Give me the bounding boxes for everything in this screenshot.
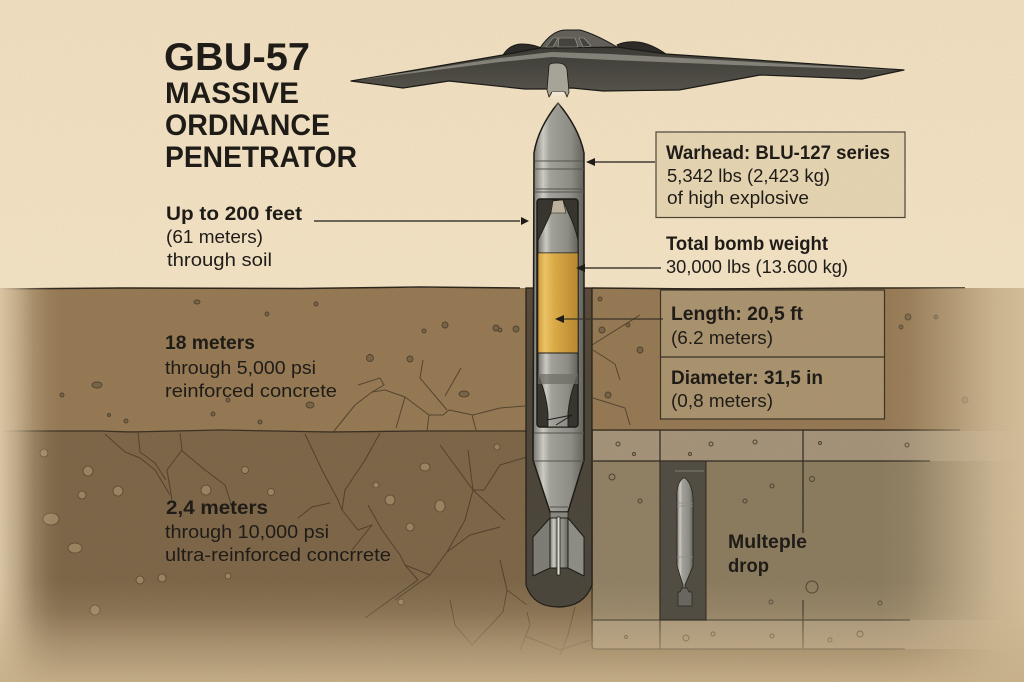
bunker lines <box>592 430 960 649</box>
text: concrete 10000 psi: ultra-reinforced concrrete <box>165 544 391 565</box>
text: total bomb weight: Total bomb weight <box>666 234 829 255</box>
panel: warhead: 5,342 lbs (2,423 kg) <box>667 165 830 186</box>
arrow: length <box>555 315 663 323</box>
outer casing <box>533 103 584 512</box>
panel: dimensions: Diameter: 31,5 in <box>671 368 823 389</box>
text: soil penetration: (61 meters) <box>166 226 263 247</box>
title: GBU-57 <box>164 36 310 79</box>
windows <box>546 38 591 47</box>
panel: warhead: of high explosive <box>667 187 809 208</box>
bomb: GBU-57 cutaway <box>533 103 584 576</box>
title <box>164 36 357 174</box>
edge fades <box>0 288 62 682</box>
text: concrete 5000 psi: through 5,000 psi <box>165 357 316 378</box>
ground surface line <box>0 287 965 289</box>
concrete slab: floor <box>593 620 1024 649</box>
text: multiple drop <box>728 531 807 577</box>
aircraft: B-2 bomber <box>351 30 904 108</box>
second shaft <box>660 461 706 620</box>
panel: dimensions <box>660 290 885 419</box>
panel: dimensions: (0,8 meters) <box>671 390 773 411</box>
title: ORDNANCE <box>165 109 330 142</box>
text: soil penetration <box>166 203 303 270</box>
shaft <box>526 288 592 607</box>
wing <box>351 47 904 91</box>
small bomb in shaft <box>660 461 706 620</box>
text: total bomb weight: 30,000 lbs (13.600 kg) <box>666 256 848 277</box>
fuze wire <box>547 415 572 425</box>
cracks <box>105 315 895 655</box>
high explosive fill <box>538 253 578 353</box>
background: sky <box>0 0 1024 290</box>
warhead aft section <box>538 353 578 427</box>
text: concrete 5000 psi: 18 meters <box>165 332 255 354</box>
aggregate <box>609 440 909 642</box>
text: multiple drop: Multeple <box>728 531 807 553</box>
text: multiple drop: drop <box>728 555 769 577</box>
concrete bunker <box>592 430 1024 649</box>
casing bands <box>534 161 584 507</box>
title: PENETRATOR <box>165 141 357 174</box>
chamber fill <box>593 461 1024 620</box>
tail fins <box>533 517 584 576</box>
wing leading edge <box>358 52 895 80</box>
text: concrete 10000 psi: through 10,000 psi <box>165 521 329 542</box>
ground cross-section <box>0 287 1024 682</box>
text: concrete 10000 psi <box>165 497 391 565</box>
panel: dimensions: Length: 20,5 ft <box>671 304 804 325</box>
warhead nose <box>538 200 578 253</box>
layer: deep rock <box>0 431 1024 682</box>
arrow: total weight <box>576 264 661 272</box>
layer: soil <box>0 288 1024 431</box>
warhead window <box>537 199 578 427</box>
lower collar <box>550 512 568 518</box>
concrete slab: roof <box>593 431 1024 461</box>
text: concrete 10000 psi: 2,4 meters <box>166 497 268 519</box>
released bomb tail <box>547 63 569 97</box>
text: concrete 5000 psi <box>165 332 337 401</box>
text: concrete 5000 psi: reinforced concrete <box>165 380 337 401</box>
text: soil penetration: through soil <box>167 249 272 270</box>
engine humps <box>503 42 666 55</box>
arrow: soil penetration <box>314 217 529 225</box>
layer boundary line <box>0 430 527 432</box>
cockpit fuselage <box>540 30 617 48</box>
title: MASSIVE <box>165 77 299 110</box>
small bomb fins <box>678 588 692 606</box>
small bomb body <box>677 478 693 589</box>
pebbles <box>60 297 968 424</box>
exhaust <box>552 92 564 108</box>
text: soil penetration: Up to 200 feet <box>166 203 303 225</box>
panel: warhead <box>656 132 905 218</box>
panel: warhead: Warhead: BLU-127 series <box>666 143 890 164</box>
panel: dimensions: (6.2 meters) <box>671 327 773 348</box>
arrow: warhead <box>586 158 655 166</box>
text: total bomb weight <box>666 234 848 277</box>
